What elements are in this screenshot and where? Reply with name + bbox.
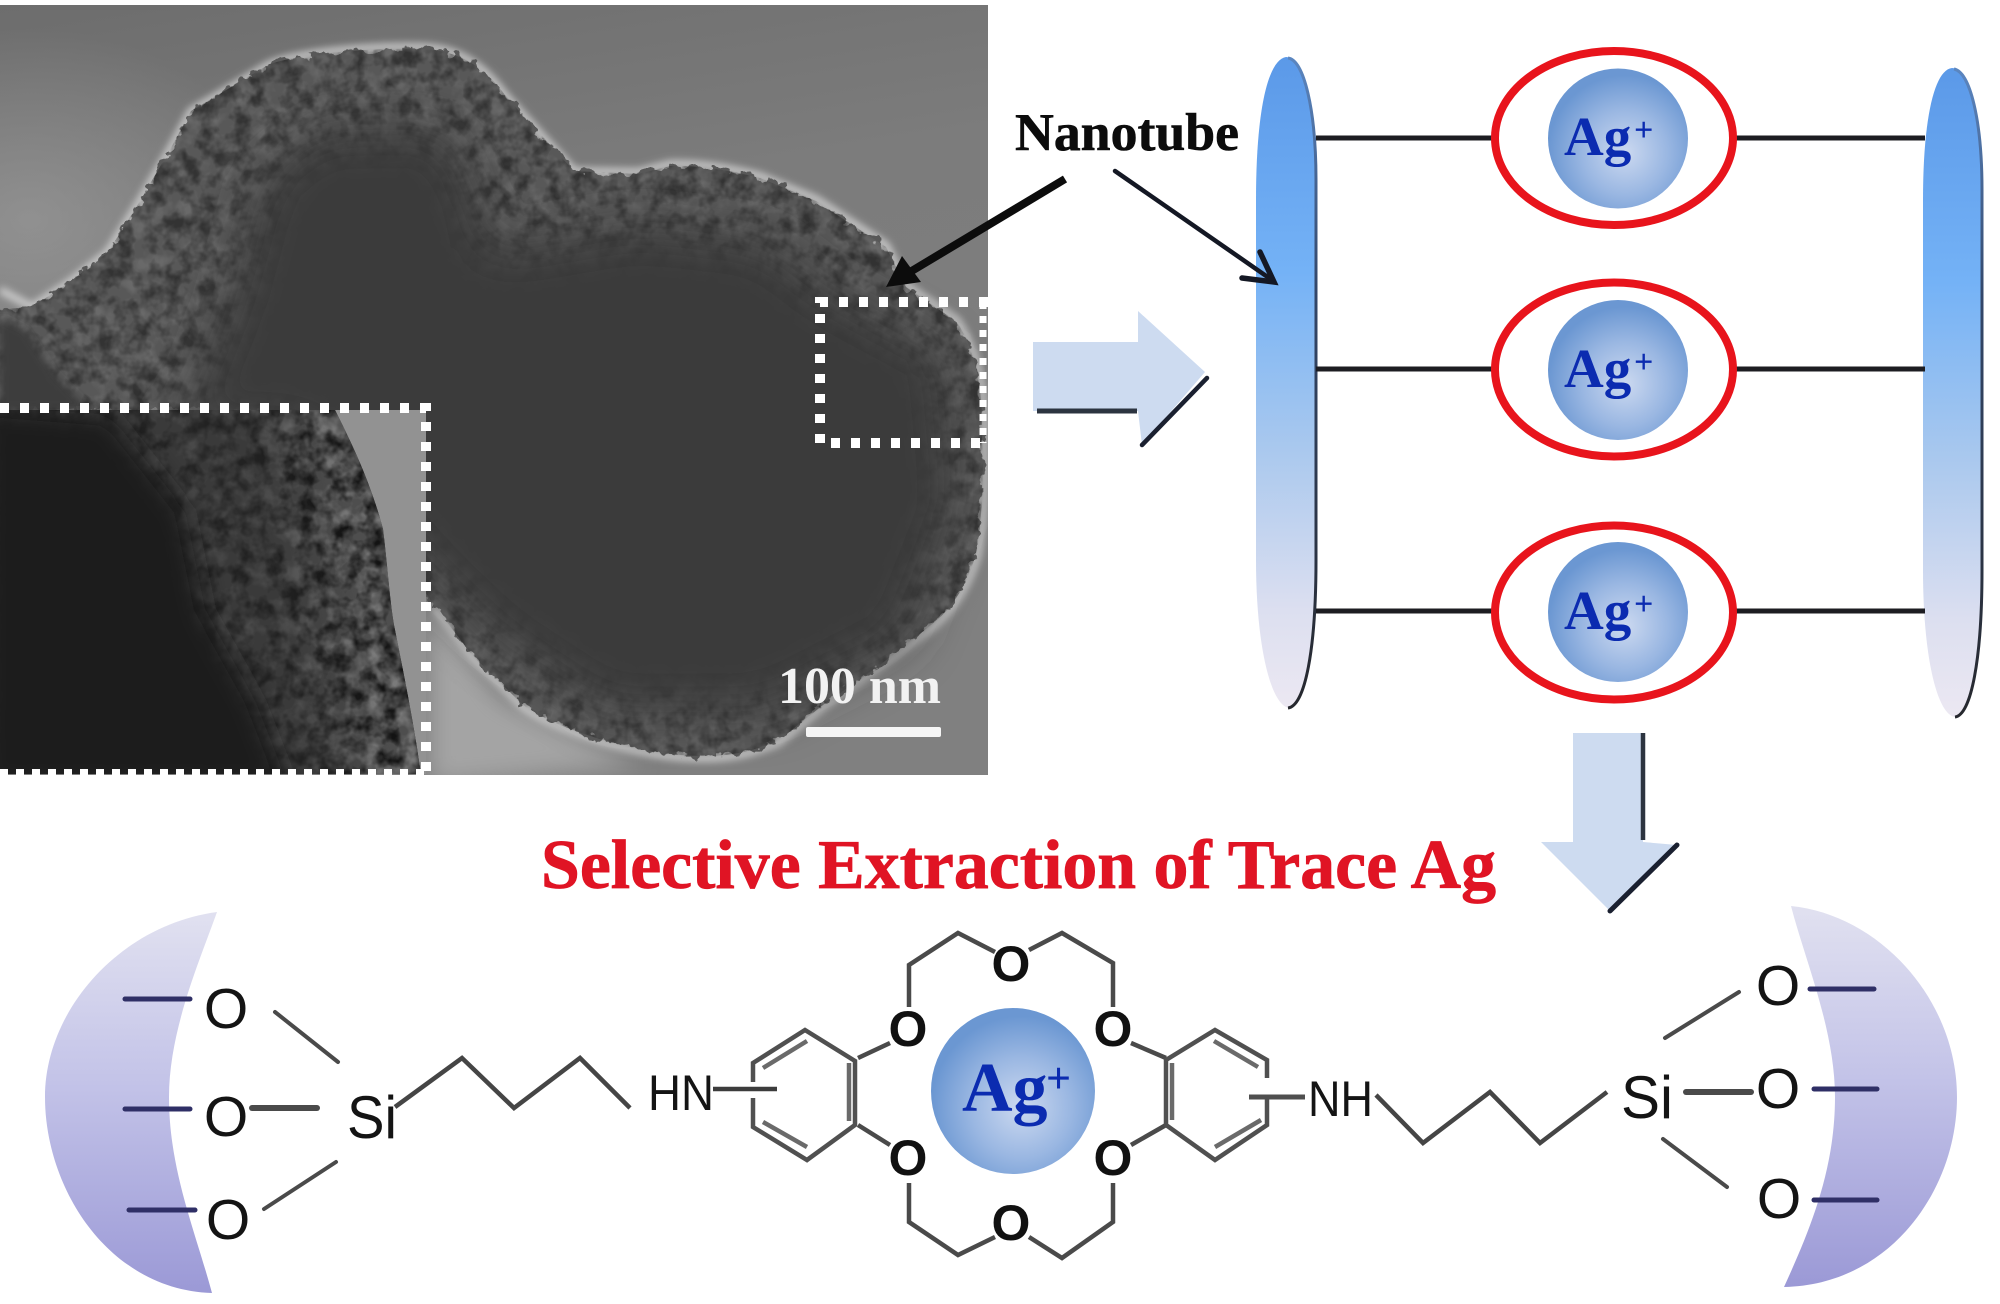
right substrate crescent [1784,906,1957,1287]
right silane anchor: O [1756,1057,1800,1121]
right nanotube wall [1923,68,1982,717]
binding site bottom [1316,526,1925,700]
binding site middle: Ag [1564,338,1631,399]
arrow: schematic to chemistry [1541,733,1677,911]
left silane anchor: O [204,977,248,1041]
binding site middle [1316,282,1925,456]
central silver ion: Ag [962,1050,1048,1127]
arrow: micrograph to schematic [1033,311,1207,445]
panel: TEM micrograph [0,5,990,790]
binding site top: Ag [1564,106,1631,167]
binding site bottom: Ag [1564,580,1631,641]
label: Nanotube: Nanotube [1015,104,1239,162]
crown ether ring: O [1094,1130,1132,1186]
inset magnified view [0,405,426,790]
title: Selective Extraction of Trace Ag [541,827,1496,904]
arrow: Nanotube to micrograph [886,179,1065,287]
crown ether ring: O [1094,1001,1132,1057]
left silane anchor: O [204,1085,248,1149]
nanoparticle halo [0,47,985,758]
left benzene ring [753,1030,855,1160]
left silane anchor: HN [648,1065,714,1121]
panel: chemical structure [45,906,1957,1293]
right silane anchor [1249,954,1877,1231]
scale label: 100 nm [778,658,941,715]
left nanotube wall [1256,57,1316,708]
crown ether ring: O [889,1001,927,1057]
central silver ion: + [1046,1054,1071,1103]
crown ether ring: O [889,1130,927,1186]
left silane anchor: Si [347,1084,397,1151]
right silane anchor: O [1757,1167,1801,1231]
binding site middle: + [1634,344,1653,381]
binding site bottom: + [1634,586,1653,623]
arrow: Nanotube to schematic tube [1115,171,1274,282]
right benzene ring [1166,1030,1267,1160]
left substrate crescent [45,912,217,1293]
crown ether ring [858,933,1166,1258]
right silane anchor: Si [1621,1064,1673,1131]
binding site top: + [1634,112,1653,149]
dashed selection box [820,302,988,443]
crown ether ring: O [992,1195,1030,1251]
panel: nanotube schematic [1256,51,1982,717]
binding site top [1316,51,1925,225]
crown ether ring: O [992,936,1030,992]
dashed inset frame [0,408,426,775]
nanoparticle body [0,40,990,770]
scale bar [806,727,941,737]
left silane anchor: O [206,1188,250,1252]
left silane anchor [125,977,777,1252]
central silver ion [931,1008,1095,1174]
right silane anchor: O [1756,954,1800,1018]
micrograph background [0,5,988,785]
right silane anchor: NH [1308,1071,1373,1127]
